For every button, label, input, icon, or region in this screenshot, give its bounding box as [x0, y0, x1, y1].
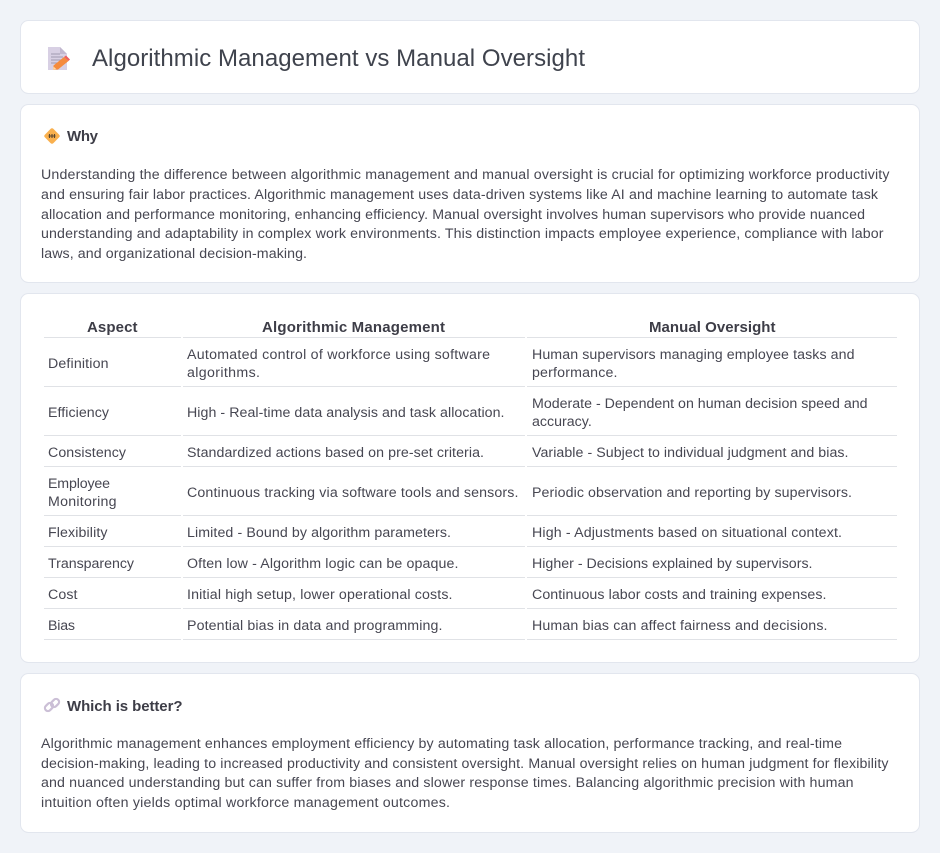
row: transparency: Higher - Decisions explained by supervisors.	[532, 556, 812, 572]
which is better paragraph: and nuanced understanding but can suffer from biases and slower response times. Balancing algorithmic precision with human	[41, 775, 854, 791]
why paragraph: allocation and performance monitoring, enhancing efficiency. Manual oversight involves human supervisors who provide nuanced	[41, 207, 865, 223]
why paragraph: laws, and organizational decision-making.	[41, 246, 307, 262]
icon: link	[44, 698, 60, 712]
why paragraph	[41, 167, 890, 262]
table header: Manual Oversight	[649, 319, 776, 336]
row: definition: Definition	[48, 356, 108, 372]
row: efficiency: High - Real-time data analysis and task allocation.	[187, 405, 504, 421]
row: flexibility: Flexibility	[48, 525, 108, 541]
row: definition: performance.	[532, 365, 618, 381]
row: employee monitoring: Periodic observation and reporting by supervisors.	[532, 485, 852, 501]
row: definition: Automated control of workforce using software	[187, 347, 490, 363]
row: cost: Continuous labor costs and training expenses.	[532, 587, 826, 603]
row: cost: Initial high setup, lower operational costs.	[187, 587, 452, 603]
why paragraph: and ensuring fair labor practices. Algorithmic management uses data-driven systems like AI and machine learning to automate task	[41, 187, 879, 203]
row: consistency: Variable - Subject to individual judgment and bias.	[532, 445, 848, 461]
row: efficiency	[48, 396, 868, 430]
heading: which is better: Which is better?	[67, 698, 182, 715]
panel: why	[20, 104, 920, 282]
why paragraph: Understanding the difference between algorithmic management and manual oversight is crucial for optimizing workforce productivity	[41, 167, 890, 183]
table header: Algorithmic Management	[262, 319, 445, 336]
which is better paragraph: decision-making, leading to increased productivity and consistent oversight. Manual oversight relies on human judgment for flexibility	[41, 756, 889, 772]
row: bias: Human bias can affect fairness and decisions.	[532, 618, 828, 634]
row: cost	[48, 587, 826, 603]
row: bias	[48, 618, 828, 634]
row: employee monitoring: Employee	[48, 476, 110, 492]
panel: comparison table	[20, 294, 920, 662]
panel: which is better	[20, 674, 920, 832]
which is better paragraph	[41, 736, 889, 811]
why paragraph: understanding and adaptability in complex work environments. This distinction impacts employee experience, compliance with labor	[41, 226, 884, 242]
row: efficiency: accuracy.	[532, 414, 592, 430]
row: bias: Bias	[48, 618, 75, 634]
row: flexibility: High - Adjustments based on situational context.	[532, 525, 842, 541]
which is better paragraph: Algorithmic management enhances employment efficiency by automating task allocation, performance tracking, and real-time	[41, 736, 842, 752]
row: definition	[48, 347, 854, 381]
row: transparency: Often low - Algorithm logic can be opaque.	[187, 556, 458, 572]
row: consistency	[48, 445, 848, 461]
row: employee monitoring	[48, 476, 852, 510]
panel: title	[20, 20, 920, 94]
row: definition: algorithms.	[187, 365, 260, 381]
title heading: Algorithmic Management vs Manual Oversight	[92, 45, 585, 72]
row: transparency: Transparency	[48, 556, 135, 572]
which is better paragraph: intuition often yields optimal workforce management outcomes.	[41, 795, 450, 811]
row: flexibility: Limited - Bound by algorithm parameters.	[187, 525, 451, 541]
row: flexibility	[48, 525, 842, 541]
table header	[87, 319, 776, 336]
row: definition: Human supervisors managing employee tasks and	[532, 347, 854, 363]
table header: Aspect	[87, 319, 138, 336]
row: efficiency: Moderate - Dependent on human decision speed and	[532, 396, 868, 412]
row: transparency	[48, 556, 812, 572]
row: efficiency: Efficiency	[48, 405, 110, 421]
row: cost: Cost	[48, 587, 78, 603]
heading: why: Why	[67, 128, 99, 145]
icon: document with pencil	[48, 47, 70, 70]
row: consistency: Standardized actions based on pre-set criteria.	[187, 445, 484, 461]
row: employee monitoring: Continuous tracking via software tools and sensors.	[187, 485, 518, 501]
icon: warning diamond	[44, 128, 60, 144]
row: employee monitoring: Monitoring	[48, 494, 116, 510]
row: bias: Potential bias in data and programming.	[187, 618, 442, 634]
row: consistency: Consistency	[48, 445, 127, 461]
